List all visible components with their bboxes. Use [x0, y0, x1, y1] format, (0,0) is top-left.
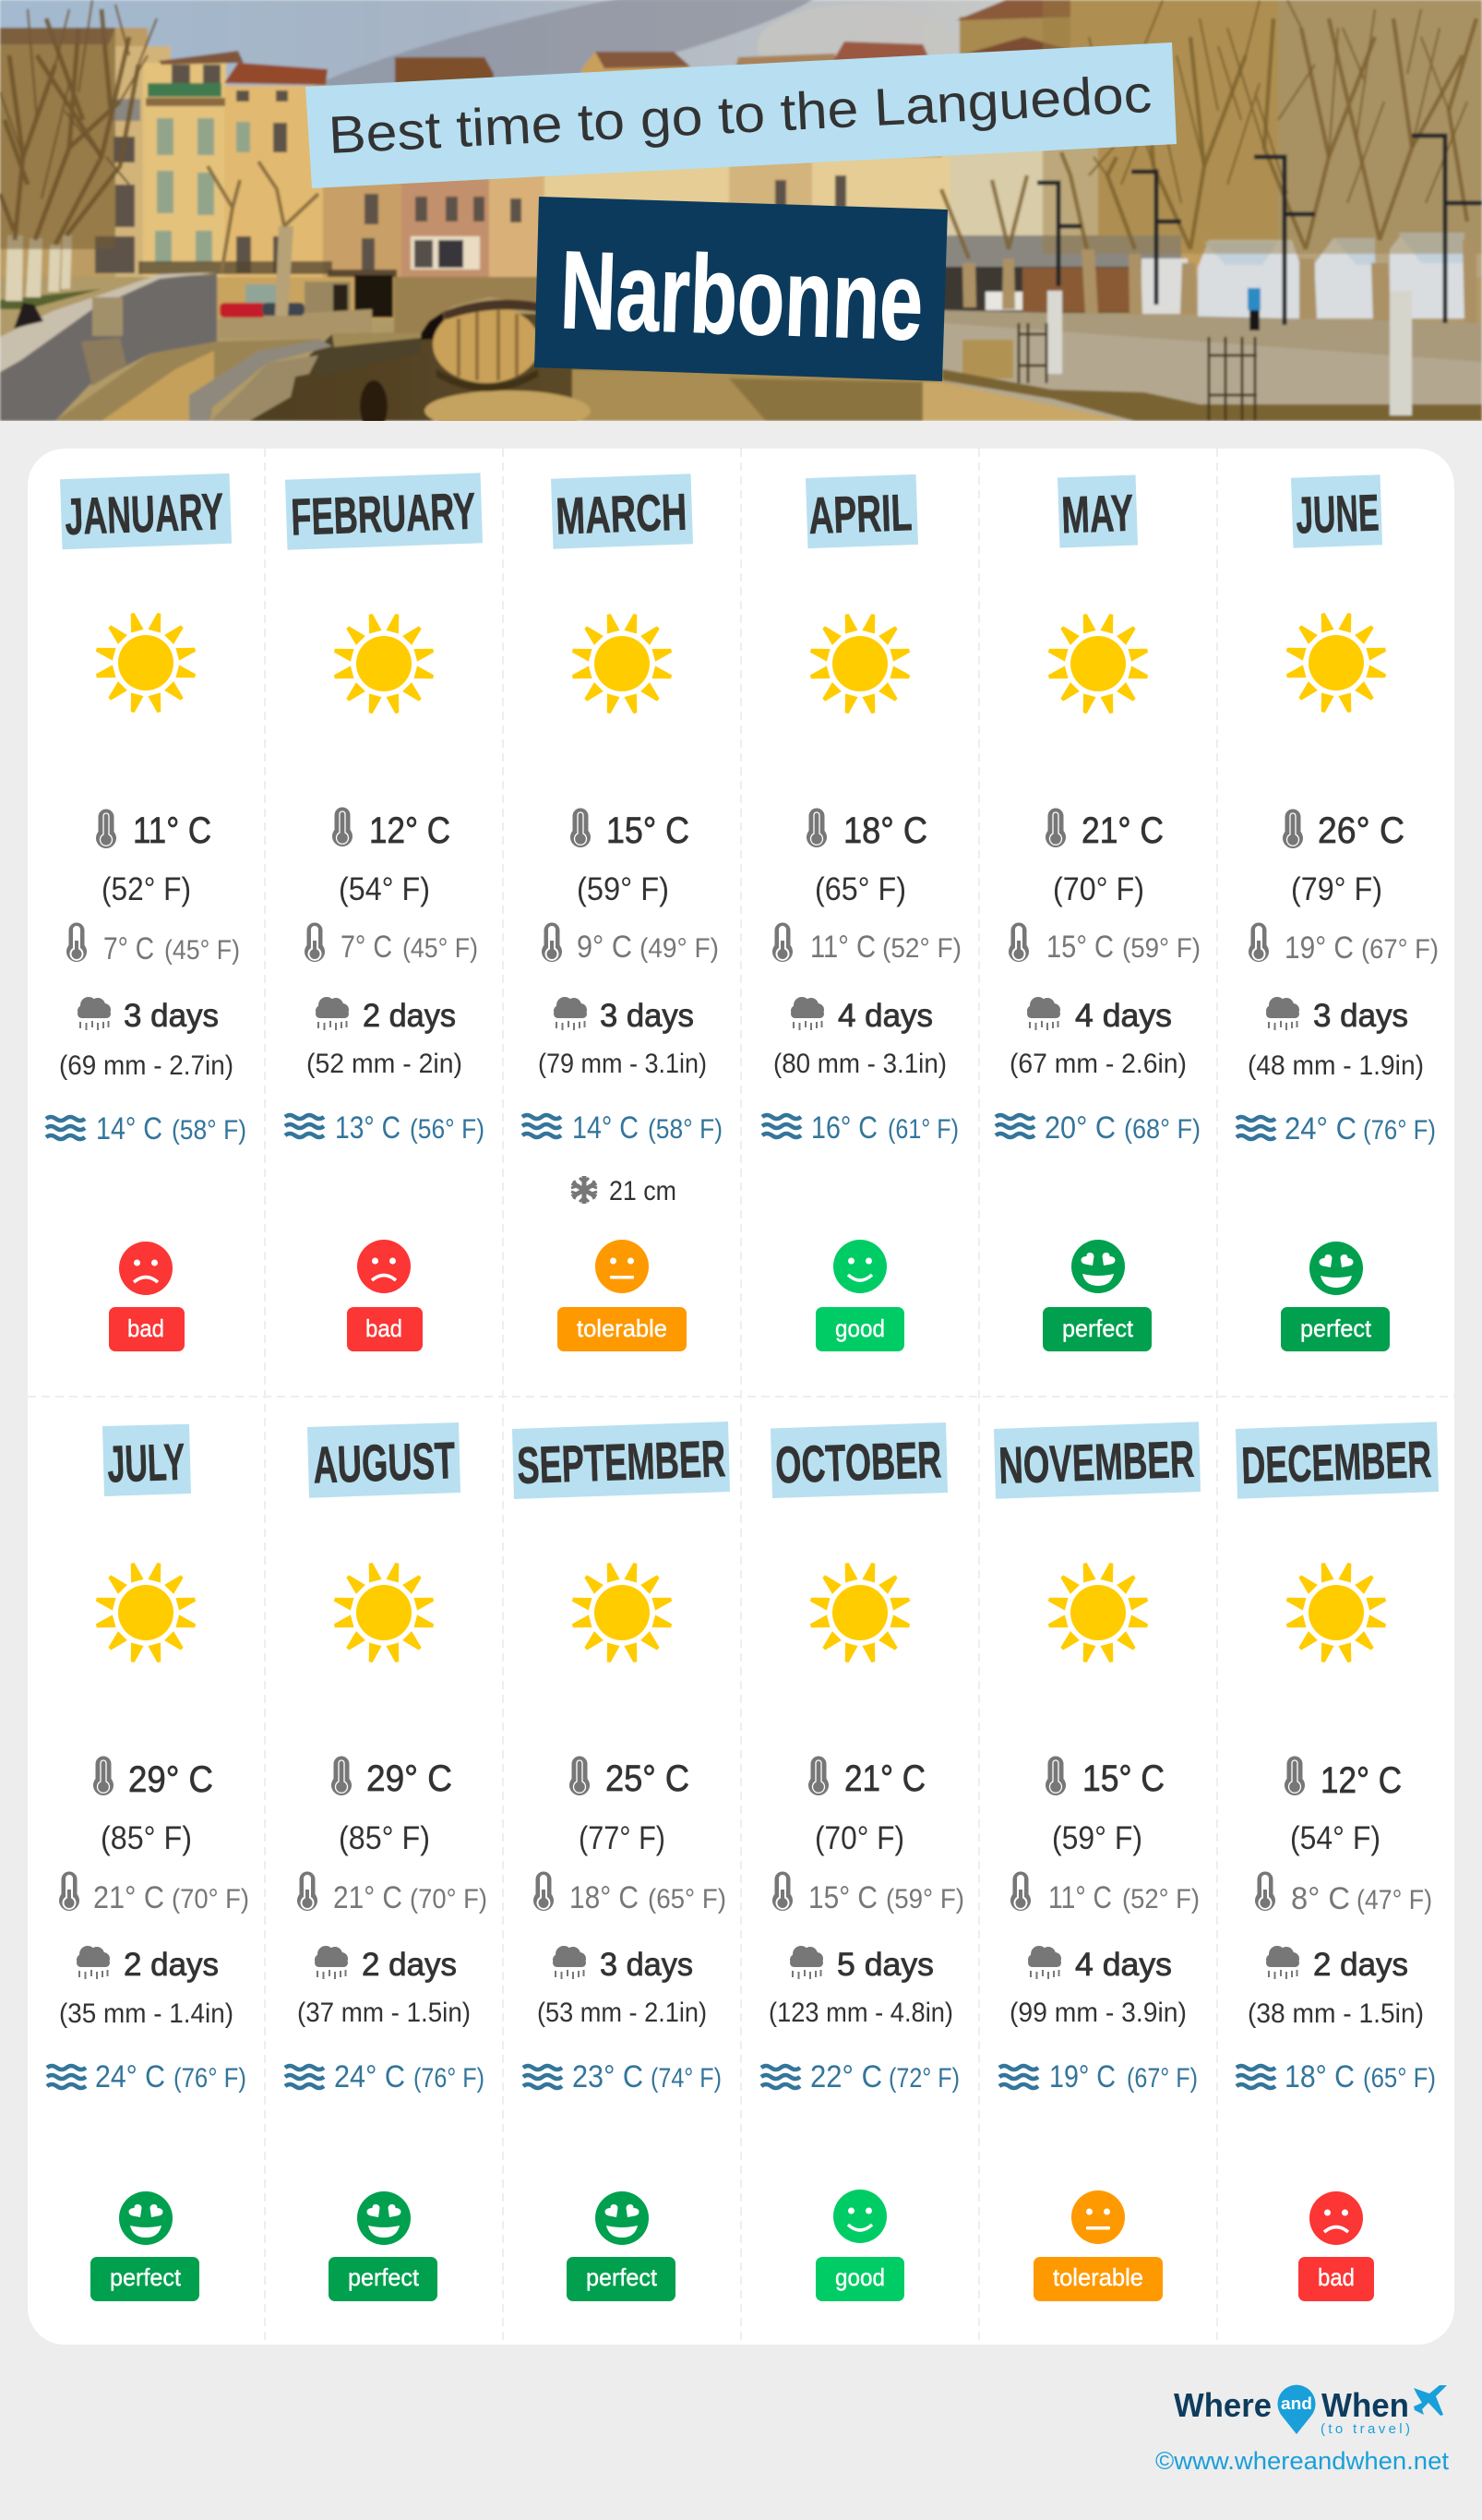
website credit: ©www.whereandwhen.net [1155, 2447, 1449, 2475]
rocks on the bank [210, 355, 318, 421]
rating badge: bad: bad [365, 1314, 402, 1342]
grass [0, 289, 102, 309]
month label: March: MARCH [555, 483, 687, 545]
month label: October: OCTOBER [774, 1430, 942, 1494]
sea temperature: 24° C [95, 2059, 165, 2094]
sea temperature: 16° C [811, 1110, 878, 1146]
high temperature in Fahrenheit: (79° F) [1291, 871, 1382, 907]
month label: July: JULY [106, 1433, 185, 1493]
rating badge: perfect: perfect [1062, 1314, 1134, 1342]
rain days [78, 997, 219, 1034]
rating face: bad [119, 1242, 173, 1295]
month label: March [551, 474, 693, 549]
rainfall: (38 mm - 1.5in) [1248, 1998, 1424, 2029]
title banner: Best time to go to the Languedoc [327, 65, 1153, 165]
low temperature: 21° C [333, 1880, 402, 1915]
month label: April: APRIL [807, 483, 913, 545]
rating badge: bad: bad [127, 1314, 164, 1342]
quay pavement and wall right [941, 310, 1482, 365]
high temperature: 12° C [369, 810, 450, 851]
low temperature: 19° C [1285, 930, 1354, 966]
high temperature in Fahrenheit: (77° F) [579, 1820, 665, 1856]
sea temperature: (76° F) [1363, 1115, 1436, 1146]
rain days [553, 1946, 693, 1983]
panel: March [522, 474, 723, 1351]
sea temperature [761, 2059, 960, 2094]
low temperature: 11° C [810, 930, 876, 965]
month label: September [512, 1422, 730, 1499]
icon: sun [571, 1562, 673, 1663]
rainfall: (123 mm - 4.8in) [769, 1998, 953, 2028]
sea temperature: (65° F) [1363, 2063, 1436, 2094]
sea temperature [999, 2059, 1198, 2094]
panel: November [994, 1422, 1201, 2301]
month label: May [1058, 474, 1138, 548]
panel: September [512, 1422, 730, 2301]
high temperature: 25° C [605, 1758, 689, 1799]
panel: October [761, 1422, 964, 2301]
sea temperature [285, 2059, 484, 2094]
rating face: perfect [595, 2191, 649, 2245]
rain days [791, 997, 933, 1034]
rain days [554, 997, 694, 1034]
high temperature in Fahrenheit: (59° F) [1052, 1820, 1142, 1856]
rain days [77, 1946, 219, 1983]
high temperature: 15° C [1082, 1758, 1165, 1799]
month label: May: MAY [1060, 484, 1134, 544]
month label: June [1291, 474, 1382, 548]
rating badge: good: good [835, 1314, 885, 1342]
storefronts and awning [941, 235, 1181, 267]
low temperature: 21° C [93, 1880, 164, 1915]
rain days: 3 days [124, 998, 219, 1034]
rating badge: perfect: perfect [586, 2263, 658, 2291]
low temperature: (67° F) [1361, 934, 1439, 965]
sea temperature: (58° F) [172, 1115, 246, 1146]
sea temperature: (72° F) [889, 2063, 960, 2094]
rain days: 2 days [363, 998, 456, 1034]
sea temperature: (61° F) [888, 1114, 959, 1145]
rain days [1027, 997, 1172, 1034]
month label: August [307, 1422, 460, 1498]
low temperature [533, 1872, 726, 1915]
low temperature: 11° C [1048, 1880, 1112, 1915]
low temperature [297, 1872, 487, 1915]
rainfall: (67 mm - 2.6in) [1010, 1049, 1187, 1079]
logo: Where and When [1174, 2385, 1447, 2437]
high temperature: 12° C [1321, 1760, 1402, 1801]
rating face: perfect [1071, 1240, 1125, 1293]
month label: June: JUNE [1295, 483, 1380, 544]
sea temperature: (76° F) [413, 2063, 484, 2094]
low temperature: (52° F) [882, 933, 962, 964]
rain days: 4 days [1075, 1947, 1172, 1983]
high temperature: 21° C [1082, 810, 1164, 851]
high temperature [1283, 809, 1404, 851]
logo: Where and When: Where [1174, 2386, 1272, 2424]
rating face: tolerable [595, 1240, 649, 1293]
high temperature [807, 809, 927, 851]
logo: Where and When: (to travel) [1321, 2421, 1410, 2437]
rainfall: (69 mm - 2.7in) [59, 1050, 233, 1081]
low temperature: (45° F) [402, 933, 478, 964]
rain days: 5 days [837, 1947, 934, 1983]
sea temperature [285, 1110, 484, 1146]
rating badge: perfect [567, 2257, 675, 2301]
white card panel [28, 449, 1454, 2345]
high temperature in Fahrenheit: (70° F) [1053, 871, 1144, 907]
high temperature [1046, 809, 1164, 851]
rainfall: (79 mm - 3.1in) [538, 1049, 707, 1079]
sea temperature: 13° C [335, 1110, 400, 1146]
rating badge: perfect: perfect [348, 2263, 420, 2291]
low temperature [59, 1872, 249, 1915]
rating badge: bad [1298, 2257, 1374, 2301]
high temperature [808, 1756, 926, 1799]
sea temperature: (67° F) [1127, 2063, 1198, 2094]
rain days [790, 1946, 934, 1983]
icon: sun [809, 613, 911, 714]
low temperature: 15° C [1046, 930, 1114, 965]
icon: sun [95, 1562, 197, 1663]
high temperature: 21° C [844, 1758, 926, 1799]
high temperature in Fahrenheit: (65° F) [815, 871, 906, 907]
low temperature: (49° F) [639, 933, 719, 964]
rain days: 3 days [600, 1947, 693, 1983]
low temperature [66, 923, 240, 966]
rating badge: bad [347, 1307, 423, 1351]
rainfall: (35 mm - 1.4in) [59, 1998, 233, 2029]
high temperature [1046, 1756, 1165, 1799]
rating face: perfect [1309, 1242, 1363, 1295]
rain days: 2 days [1313, 1947, 1408, 1983]
high temperature in Fahrenheit: (85° F) [339, 1820, 430, 1856]
icon: sun [1285, 612, 1387, 714]
low temperature [1255, 1872, 1432, 1916]
month label: January: JANUARY [64, 482, 224, 546]
month label: July [102, 1424, 191, 1496]
panel: August [285, 1422, 487, 2301]
month label: September: SEPTEMBER [516, 1429, 726, 1494]
sea temperature: (74° F) [651, 2063, 722, 2094]
high temperature [570, 809, 689, 851]
sea temperature [47, 2059, 246, 2094]
icon: sun [333, 1562, 435, 1663]
low temperature [772, 923, 962, 965]
low temperature: 7° C [103, 931, 154, 966]
high temperature [93, 1756, 213, 1800]
month label: November [994, 1422, 1201, 1499]
low temperature: (70° F) [410, 1884, 487, 1914]
sea temperature: 19° C [1049, 2059, 1116, 2094]
low temperature: (65° F) [648, 1884, 726, 1914]
rainfall: (37 mm - 1.5in) [297, 1998, 471, 2028]
rating face: bad [357, 1240, 411, 1293]
rating badge: perfect: perfect [1300, 1314, 1372, 1342]
stone bridge [393, 275, 537, 334]
rating badge: perfect [90, 2257, 199, 2301]
sea temperature: 14° C [572, 1110, 639, 1146]
logo: Where and When: When [1321, 2386, 1409, 2424]
white beach huts [1198, 233, 1464, 318]
sea temperature: 20° C [1045, 1110, 1116, 1146]
rain days: 4 days [1075, 998, 1172, 1034]
snowfall: 21 cm [609, 1176, 676, 1206]
low temperature: (59° F) [1122, 933, 1201, 964]
rating badge: bad [109, 1307, 185, 1351]
high temperature in Fahrenheit: (70° F) [815, 1820, 904, 1856]
high temperature [96, 809, 211, 851]
high temperature: 26° C [1318, 810, 1404, 851]
icon: sun [809, 1562, 911, 1663]
month label: August: AUGUST [312, 1431, 456, 1494]
rain days: 3 days [600, 998, 694, 1034]
rating badge: perfect [1043, 1307, 1152, 1351]
rating face: good [833, 2190, 887, 2243]
person in blue [1248, 288, 1261, 330]
low temperature [1009, 923, 1201, 965]
panel: December [1236, 1422, 1439, 2301]
rating badge: tolerable [1034, 2257, 1163, 2301]
rating face: perfect [119, 2191, 173, 2245]
low temperature: (45° F) [164, 935, 240, 966]
tree canopy right [1043, 0, 1482, 254]
sea temperature: 18° C [1285, 2059, 1355, 2094]
low stone wall [220, 306, 375, 321]
lower facades behind the quay [218, 277, 397, 319]
low temperature: 8° C [1291, 1881, 1350, 1916]
low temperature: (47° F) [1357, 1885, 1432, 1915]
high temperature in Fahrenheit: (54° F) [339, 871, 430, 907]
high temperature [332, 807, 450, 851]
high temperature: 11° C [133, 810, 211, 851]
icon: map pin [1277, 2385, 1316, 2434]
rating badge: perfect [329, 2257, 437, 2301]
rating badge: good [816, 2257, 904, 2301]
rating badge: bad: bad [1318, 2263, 1355, 2291]
low temperature [1010, 1872, 1200, 1915]
walkway [55, 339, 323, 421]
icon: sun [571, 613, 673, 714]
sea temperature [996, 1110, 1201, 1146]
rating badge: good [816, 1307, 904, 1351]
month label: February: FEBRUARY [290, 482, 476, 546]
month label: April [806, 474, 918, 548]
snowfall [571, 1176, 676, 1206]
rating badge: perfect [1281, 1307, 1390, 1351]
low temperature: 7° C [341, 930, 392, 965]
low temperature: 18° C [569, 1880, 639, 1915]
high temperature in Fahrenheit: (59° F) [577, 871, 669, 907]
high temperature in Fahrenheit: (54° F) [1290, 1820, 1380, 1856]
rain days [315, 1946, 457, 1983]
panel: April [762, 474, 962, 1351]
rain days [1266, 997, 1408, 1034]
month label: October [771, 1422, 948, 1498]
high temperature: 18° C [843, 810, 927, 851]
header photo: Narbonne canal [0, 0, 1482, 432]
low temperature [542, 923, 719, 965]
rainfall: (80 mm - 3.1in) [773, 1049, 947, 1079]
seated person [14, 303, 43, 329]
high temperature [569, 1756, 689, 1799]
sea temperature: 24° C [1285, 1111, 1357, 1146]
canal water [249, 312, 646, 421]
high temperature: 29° C [366, 1758, 452, 1799]
panel: January [46, 474, 246, 1351]
rainfall: (48 mm - 1.9in) [1248, 1050, 1424, 1081]
rainfall: (99 mm - 3.9in) [1010, 1998, 1187, 2028]
rain days: 2 days [362, 1947, 457, 1983]
rain days: 4 days [838, 998, 933, 1034]
sea temperature: (56° F) [410, 1114, 484, 1145]
sea temperature: (68° F) [1124, 1114, 1201, 1145]
rating badge: good: good [835, 2263, 885, 2291]
high temperature [1285, 1756, 1402, 1801]
lamp posts [1037, 136, 1482, 325]
icon: map pin: and [1281, 2394, 1312, 2413]
high temperature [331, 1756, 452, 1799]
low temperature [305, 923, 478, 965]
sea temperature: 22° C [810, 2059, 882, 2094]
white posts [1047, 291, 1062, 374]
sea temperature: (58° F) [648, 1114, 723, 1145]
rain days [1028, 1946, 1172, 1983]
icon: sun [95, 612, 197, 714]
rain days [316, 997, 456, 1034]
rating face: perfect [357, 2191, 411, 2245]
high temperature: 29° C [128, 1759, 213, 1800]
city name banner: Narbonne [558, 228, 925, 364]
rain days: 2 days [124, 1947, 219, 1983]
rating badge: perfect: perfect [110, 2263, 182, 2291]
sea temperature [1237, 2059, 1436, 2094]
sea temperature: 24° C [334, 2059, 405, 2094]
icon: sun [1285, 1562, 1387, 1663]
low temperature: (52° F) [1122, 1884, 1200, 1914]
low temperature [772, 1872, 964, 1915]
month label: February [285, 473, 483, 550]
sea temperature: (76° F) [173, 2063, 246, 2094]
tree trunks right [962, 240, 1476, 323]
sea temperature [46, 1111, 246, 1146]
high temperature in Fahrenheit: (52° F) [102, 871, 191, 907]
city name banner [534, 197, 948, 381]
title banner [305, 42, 1177, 188]
bridge reflection [433, 306, 540, 383]
rain days [1266, 1946, 1408, 1983]
sea temperature: 23° C [572, 2059, 643, 2094]
icon: sun [1047, 613, 1149, 714]
rainfall: (53 mm - 2.1in) [537, 1998, 707, 2028]
wooden tree guards [1019, 323, 1257, 421]
icon: sun [1047, 1562, 1149, 1663]
low temperature: 15° C [808, 1880, 878, 1915]
high temperature: 15° C [606, 810, 689, 851]
grey quay wall [0, 274, 217, 421]
sea temperature [522, 1110, 723, 1146]
panel: June [1237, 474, 1439, 1351]
low temperature: (70° F) [172, 1884, 249, 1914]
month label: January [60, 474, 232, 549]
low temperature: 9° C [577, 930, 632, 965]
grey steps [189, 340, 332, 421]
low temperature: (59° F) [886, 1884, 964, 1914]
sea temperature [523, 2059, 722, 2094]
rainfall: (52 mm - 2in) [306, 1049, 462, 1079]
rating face: tolerable [1071, 2190, 1125, 2244]
rating face: bad [1309, 2191, 1363, 2245]
icon: sun [333, 613, 435, 714]
rating badge: tolerable: tolerable [1053, 2263, 1143, 2291]
sea temperature [762, 1110, 959, 1146]
month label: November: NOVEMBER [998, 1430, 1195, 1494]
icon: airplane [1414, 2385, 1447, 2416]
panel: July [47, 1424, 249, 2301]
high temperature in Fahrenheit: (85° F) [101, 1820, 192, 1856]
red car [220, 303, 266, 318]
rating face: good [833, 1240, 887, 1293]
panel: February [285, 473, 484, 1351]
sea temperature [1237, 1111, 1436, 1146]
rating badge: tolerable [557, 1307, 687, 1351]
low temperature [1249, 923, 1439, 966]
rating badge: tolerable: tolerable [577, 1314, 667, 1342]
sea temperature: 14° C [96, 1111, 162, 1146]
cream tree trunks [6, 235, 72, 301]
rain days: 3 days [1313, 998, 1408, 1034]
panel: May [996, 474, 1201, 1351]
